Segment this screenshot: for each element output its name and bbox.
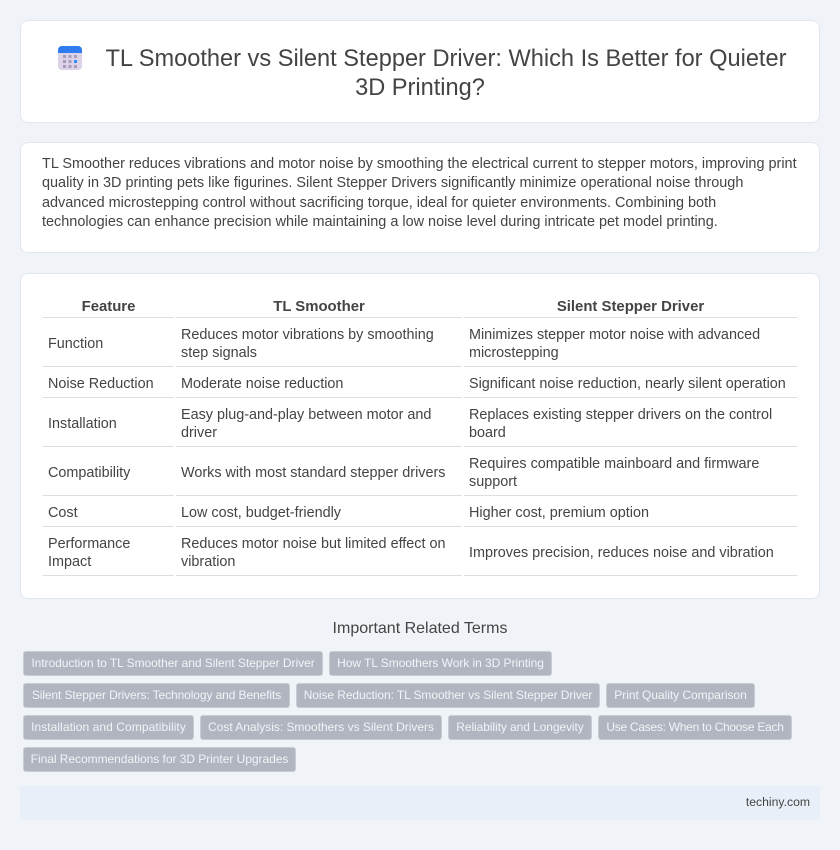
- tag: Final Recommendations for 3D Printer Upgrades: [31, 752, 288, 766]
- text block: introduction: advanced microstepping control without sacrificing torque, ideal for quieter environments. Combining both: [42, 195, 716, 211]
- tag: [329, 651, 552, 676]
- related terms tags: [23, 651, 792, 772]
- tag: [23, 747, 296, 772]
- tag: [448, 715, 592, 740]
- comparison table: Easy plug-and-play between motor and: [181, 407, 431, 423]
- tag: [598, 715, 792, 740]
- title second line: 3D Printing?: [355, 75, 485, 101]
- header: Feature: Feature: [82, 299, 135, 315]
- tag: Print Quality Comparison: [614, 688, 747, 702]
- tag: Silent Stepper Drivers: Technology and Benefits: [32, 688, 281, 702]
- tag: [23, 715, 194, 740]
- row: Cost: Cost: [48, 505, 78, 521]
- header: TL Smoother: TL Smoother: [273, 299, 365, 315]
- heading: Important Related Terms: Important Related Terms: [333, 620, 507, 637]
- footer bar: [20, 786, 820, 820]
- row: Performance Impact: [48, 536, 130, 570]
- comparison table: Moderate noise reduction: [181, 376, 343, 392]
- panel: comparison table: [20, 273, 820, 599]
- comparison table: Reduces motor vibrations by smoothing: [181, 327, 434, 343]
- tag: [606, 683, 755, 708]
- row: Installation: Installation: [48, 416, 117, 432]
- tag: [200, 715, 442, 740]
- panel: title header: [20, 20, 820, 123]
- comparison table: Significant noise reduction, nearly silent operation: [469, 376, 786, 392]
- tag: Installation and Compatibility: [31, 720, 186, 734]
- comparison table: Minimizes stepper motor noise with advanced: [469, 327, 760, 343]
- tag: Noise Reduction: TL Smoother vs Silent Stepper Driver: [304, 688, 592, 702]
- comparison table: Low cost, budget-friendly: [181, 505, 341, 521]
- text block: introduction: technologies can enhance precision while maintaining a low noise level during intricate pet model printing.: [42, 214, 718, 230]
- panel: introduction text: [20, 142, 820, 253]
- comparison table: Higher cost, premium option: [469, 505, 649, 521]
- row: Function: Function: [48, 336, 103, 352]
- row: Performance Impact: Performance: [48, 536, 130, 552]
- comparison table: support: [469, 474, 517, 490]
- comparison table: vibration: [181, 554, 235, 570]
- footer source: techiny.com: [746, 795, 810, 809]
- text block: introduction: quality in 3D printing pets like figurines. Silent Stepper Drivers significantly minimize operational noise through: [42, 175, 743, 191]
- comparison table: Replaces existing stepper drivers on the control: [469, 407, 772, 423]
- header: Silent Stepper Driver: Silent Stepper Driver: [557, 299, 704, 315]
- row: Noise Reduction: Noise Reduction: [48, 376, 154, 392]
- icon: calendar: [58, 46, 82, 70]
- tag: Introduction to TL Smoother and Silent Stepper Driver: [31, 656, 315, 670]
- text block: introduction: [42, 156, 797, 230]
- comparison table: step signals: [181, 345, 257, 361]
- tag: Reliability and Longevity: [456, 720, 584, 734]
- tag: Use Cases: When to Choose Each: [606, 720, 784, 734]
- comparison table: driver: [181, 425, 217, 441]
- comparison table: microstepping: [469, 345, 559, 361]
- row: Compatibility: Compatibility: [48, 465, 130, 481]
- tag: [296, 683, 600, 708]
- tag: [23, 651, 323, 676]
- tag: How TL Smoothers Work in 3D Printing: [337, 656, 544, 670]
- comparison table: Requires compatible mainboard and firmware: [469, 456, 759, 472]
- title: TL Smoother vs Silent Stepper Driver: Which Is Better for Quieter: [106, 46, 786, 72]
- text block: introduction: TL Smoother reduces vibrations and motor noise by smoothing the electrical current to stepper motors, improving print: [42, 156, 797, 172]
- comparison table: Reduces motor noise but limited effect on: [181, 536, 446, 552]
- tag: [23, 683, 290, 708]
- comparison table: Works with most standard stepper drivers: [181, 465, 445, 481]
- comparison table: board: [469, 425, 506, 441]
- comparison table: [43, 299, 797, 576]
- tag: Cost Analysis: Smoothers vs Silent Drivers: [208, 720, 434, 734]
- comparison table: Improves precision, reduces noise and vibration: [469, 545, 774, 561]
- row: Performance Impact: Impact: [48, 554, 91, 570]
